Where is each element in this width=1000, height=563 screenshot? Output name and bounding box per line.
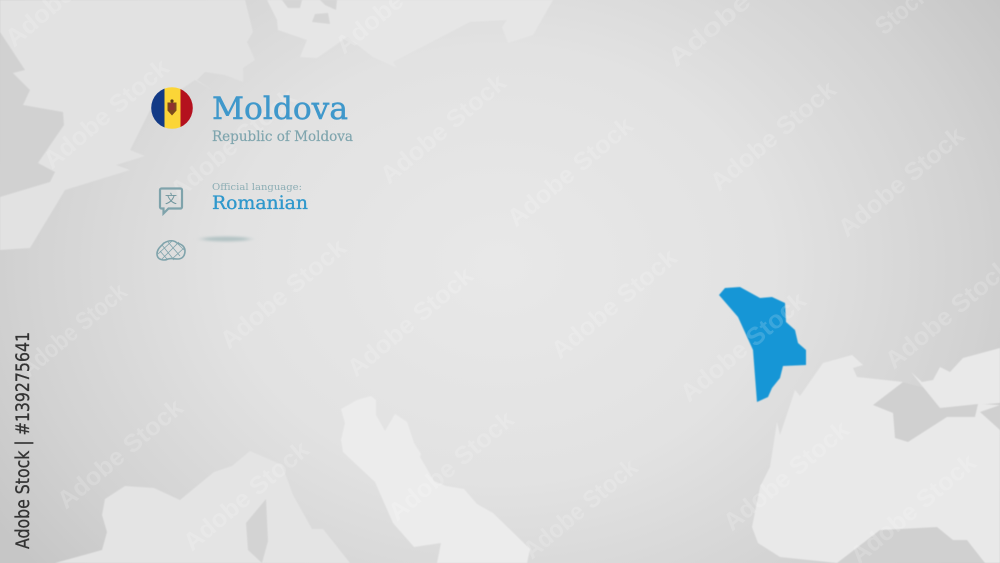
watermark id: Adobe Stock | #139275641	[13, 332, 34, 549]
watermarks: Adobe Stock	[215, 233, 352, 355]
loading bar smudge	[202, 236, 250, 242]
watermarks: Adobe Stock	[52, 393, 189, 515]
land: north-west	[0, 0, 255, 250]
icon: language speech bubble: 文	[165, 191, 177, 206]
label: official language: Official language:	[212, 182, 302, 193]
watermarks: Adobe Stock	[375, 68, 512, 190]
land: south-east	[752, 355, 1000, 563]
land: peninsula	[341, 396, 530, 563]
land: north centre lakes	[282, 0, 337, 24]
watermarks: Adobe Stock	[178, 435, 315, 557]
watermarks: Adobe	[662, 0, 757, 73]
title: Moldova	[212, 91, 348, 127]
icon: language speech bubble	[160, 188, 182, 214]
land: north centre	[267, 0, 553, 68]
watermarks: Adobe Stock	[15, 278, 133, 383]
watermarks: Adobe Stock	[675, 286, 812, 408]
watermarks: Adobe Stock	[546, 243, 683, 365]
icon: Moldova flag	[150, 86, 194, 130]
watermarks: Adobe Stock	[383, 405, 520, 527]
value: Romanian: Romanian	[212, 193, 308, 214]
watermarks: Adobe Stock	[502, 111, 639, 233]
watermarks: Adobe Stock	[705, 75, 842, 197]
land: south-east darker regions	[837, 382, 1000, 563]
watermarks: Adobe Stock	[833, 121, 970, 243]
subtitle: Republic of Moldova	[212, 129, 353, 145]
land: south-west inlet	[246, 499, 268, 563]
watermarks: Adobe Stock	[165, 83, 302, 205]
watermarks: Adobe Stock	[718, 415, 855, 537]
icon: map area	[157, 241, 185, 260]
watermarks: Adobe Stock	[342, 261, 479, 383]
watermarks: Adobe Stock	[38, 53, 175, 175]
land: south-west	[55, 451, 350, 563]
highlighted country: Moldova	[719, 287, 806, 402]
land: east	[911, 348, 1000, 408]
watermarks: Adobe Stock	[518, 453, 643, 563]
land: north-west darker region	[0, 32, 64, 197]
